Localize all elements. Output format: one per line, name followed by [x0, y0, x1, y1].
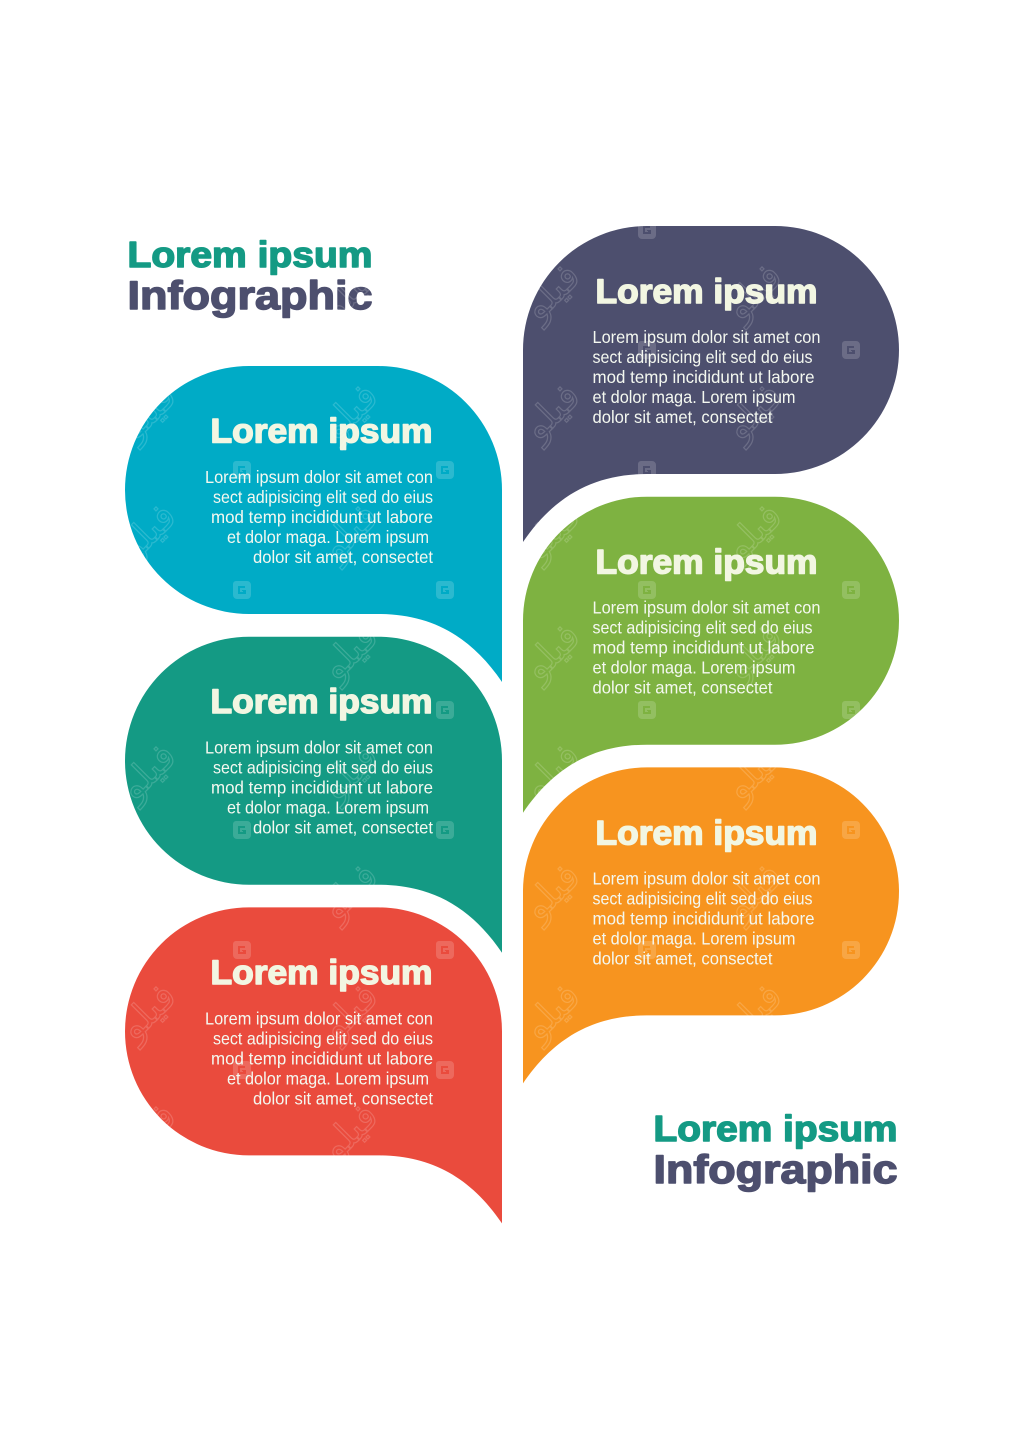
body text: teal bubble: et dolor maga. Lorem ipsum [227, 798, 429, 818]
watermark: repeating logo text: فيلو [714, 854, 791, 931]
title: top left: Lorem ipsum [128, 234, 372, 275]
body text: orange bubble: mod temp incididunt ut labore [592, 908, 814, 928]
body text: cyan bubble: Lorem ipsum dolor sit amet con [205, 467, 433, 487]
watermark: repeating logo text: فيلو [310, 614, 387, 691]
body text: green bubble: Lorem ipsum dolor sit amet con [592, 598, 820, 618]
body text: orange bubble: et dolor maga. Lorem ipsum [592, 928, 796, 948]
watermark: repeating logo text: فيلو [310, 374, 387, 451]
body text: red bubble [205, 1008, 433, 1108]
body text: red bubble: sect adipisicing elit sed do eius [213, 1028, 433, 1048]
bubble shape: red [125, 907, 502, 1223]
bubble shape: green [523, 497, 899, 813]
watermark: repeating logo text: فيلو [108, 494, 185, 571]
body text: red bubble: Lorem ipsum dolor sit amet con [205, 1008, 433, 1028]
watermark: small rounded logo marks [233, 221, 860, 1079]
body text: orange bubble: dolor sit amet, consectet [592, 948, 773, 968]
bubble shape: cyan [125, 366, 502, 682]
bubble shape: navy [523, 226, 899, 542]
panel: cyan speech bubble [125, 366, 502, 682]
watermark: repeating logo text: فيلو [512, 854, 589, 931]
watermark: repeating logo text: فيلو [310, 494, 387, 571]
body text: green bubble: dolor sit amet, consectet [592, 678, 773, 698]
body text: navy bubble: mod temp incididunt ut labore [592, 367, 814, 387]
body text: orange bubble [592, 868, 820, 968]
watermark: repeating logo text: فيلو [310, 254, 387, 331]
title: top left [128, 234, 372, 318]
body text: orange bubble: Lorem ipsum dolor sit amet con [592, 868, 820, 888]
body text: green bubble: sect adipisicing elit sed do eius [592, 618, 813, 638]
panel: orange speech bubble [523, 767, 899, 1083]
heading: red bubble: Lorem ipsum [210, 954, 432, 992]
body text: cyan bubble: et dolor maga. Lorem ipsum [227, 527, 429, 547]
panel: green speech bubble [523, 497, 899, 813]
panel: navy speech bubble [523, 226, 899, 542]
bubble shape: teal [125, 637, 502, 953]
watermark: repeating logo text: فيلو [714, 974, 791, 1051]
heading: orange bubble: Lorem ipsum [596, 814, 818, 852]
body text: navy bubble: Lorem ipsum dolor sit amet con [592, 327, 820, 347]
body text: navy bubble [592, 327, 820, 427]
watermark: repeating logo text: فيلو [108, 974, 185, 1051]
watermark: repeating logo text: فيلو [512, 974, 589, 1051]
body text: green bubble: et dolor maga. Lorem ipsum [592, 658, 796, 678]
body text: green bubble: mod temp incididunt ut labore [592, 638, 814, 658]
body text: cyan bubble: sect adipisicing elit sed do eius [213, 487, 433, 507]
watermark: repeating logo text: فيلو [310, 854, 387, 931]
watermark: repeating logo text: فيلو [108, 374, 185, 451]
heading: green bubble: Lorem ipsum [596, 544, 818, 582]
body text: orange bubble: sect adipisicing elit sed do eius [592, 888, 813, 908]
body text: red bubble: mod temp incididunt ut labore [211, 1048, 433, 1068]
watermark: repeating logo text: فيلو [512, 614, 589, 691]
heading: navy bubble: Lorem ipsum [596, 273, 818, 311]
title: bottom right [654, 1108, 898, 1192]
body text: teal bubble: Lorem ipsum dolor sit amet con [205, 738, 433, 758]
watermark: repeating logo text: فيلو [714, 374, 791, 451]
watermark: repeating logo text: فيلو [714, 734, 791, 811]
body text: navy bubble: et dolor maga. Lorem ipsum [592, 387, 796, 407]
watermark: repeating logo text: فيلو [714, 254, 791, 331]
watermark: repeating logo text: فيلو [714, 494, 791, 571]
watermark: repeating logo text: فيلو [310, 974, 387, 1051]
watermark: repeating logo text: فيلو [310, 1094, 387, 1171]
body text: cyan bubble: mod temp incididunt ut labore [211, 507, 433, 527]
body text: red bubble: et dolor maga. Lorem ipsum [227, 1068, 429, 1088]
watermark: repeating logo text [108, 254, 791, 1171]
watermark: repeating logo text: فيلو [310, 734, 387, 811]
body text: teal bubble: mod temp incididunt ut labore [211, 778, 433, 798]
body text: green bubble [592, 598, 820, 698]
watermark: repeating logo text: فيلو [108, 734, 185, 811]
heading: cyan bubble: Lorem ipsum [210, 412, 432, 450]
watermark: repeating logo text: فيلو [108, 1094, 185, 1171]
watermark: repeating logo text: فيلو [512, 254, 589, 331]
body text: teal bubble: dolor sit amet, consectet [253, 818, 433, 838]
title: bottom right: Infographic [654, 1148, 898, 1192]
bubble shape: orange [523, 767, 899, 1083]
body text: teal bubble: sect adipisicing elit sed do eius [213, 758, 433, 778]
watermark: repeating logo text: فيلو [714, 614, 791, 691]
body text: navy bubble: sect adipisicing elit sed do eius [592, 347, 813, 367]
body text: cyan bubble [205, 467, 433, 567]
body text: teal bubble [205, 738, 433, 838]
heading: teal bubble: Lorem ipsum [210, 683, 432, 721]
body text: cyan bubble: dolor sit amet, consectet [253, 547, 433, 567]
watermark: repeating logo text: فيلو [512, 734, 589, 811]
panel: red speech bubble [125, 907, 502, 1223]
title: top left: Infographic [128, 274, 372, 318]
body text: navy bubble: dolor sit amet, consectet [592, 407, 773, 427]
title: bottom right: Lorem ipsum [654, 1108, 898, 1149]
panel: teal speech bubble [125, 637, 502, 953]
body text: red bubble: dolor sit amet, consectet [253, 1088, 433, 1108]
watermark: repeating logo text: فيلو [512, 494, 589, 571]
watermark: repeating logo text: فيلو [512, 374, 589, 451]
